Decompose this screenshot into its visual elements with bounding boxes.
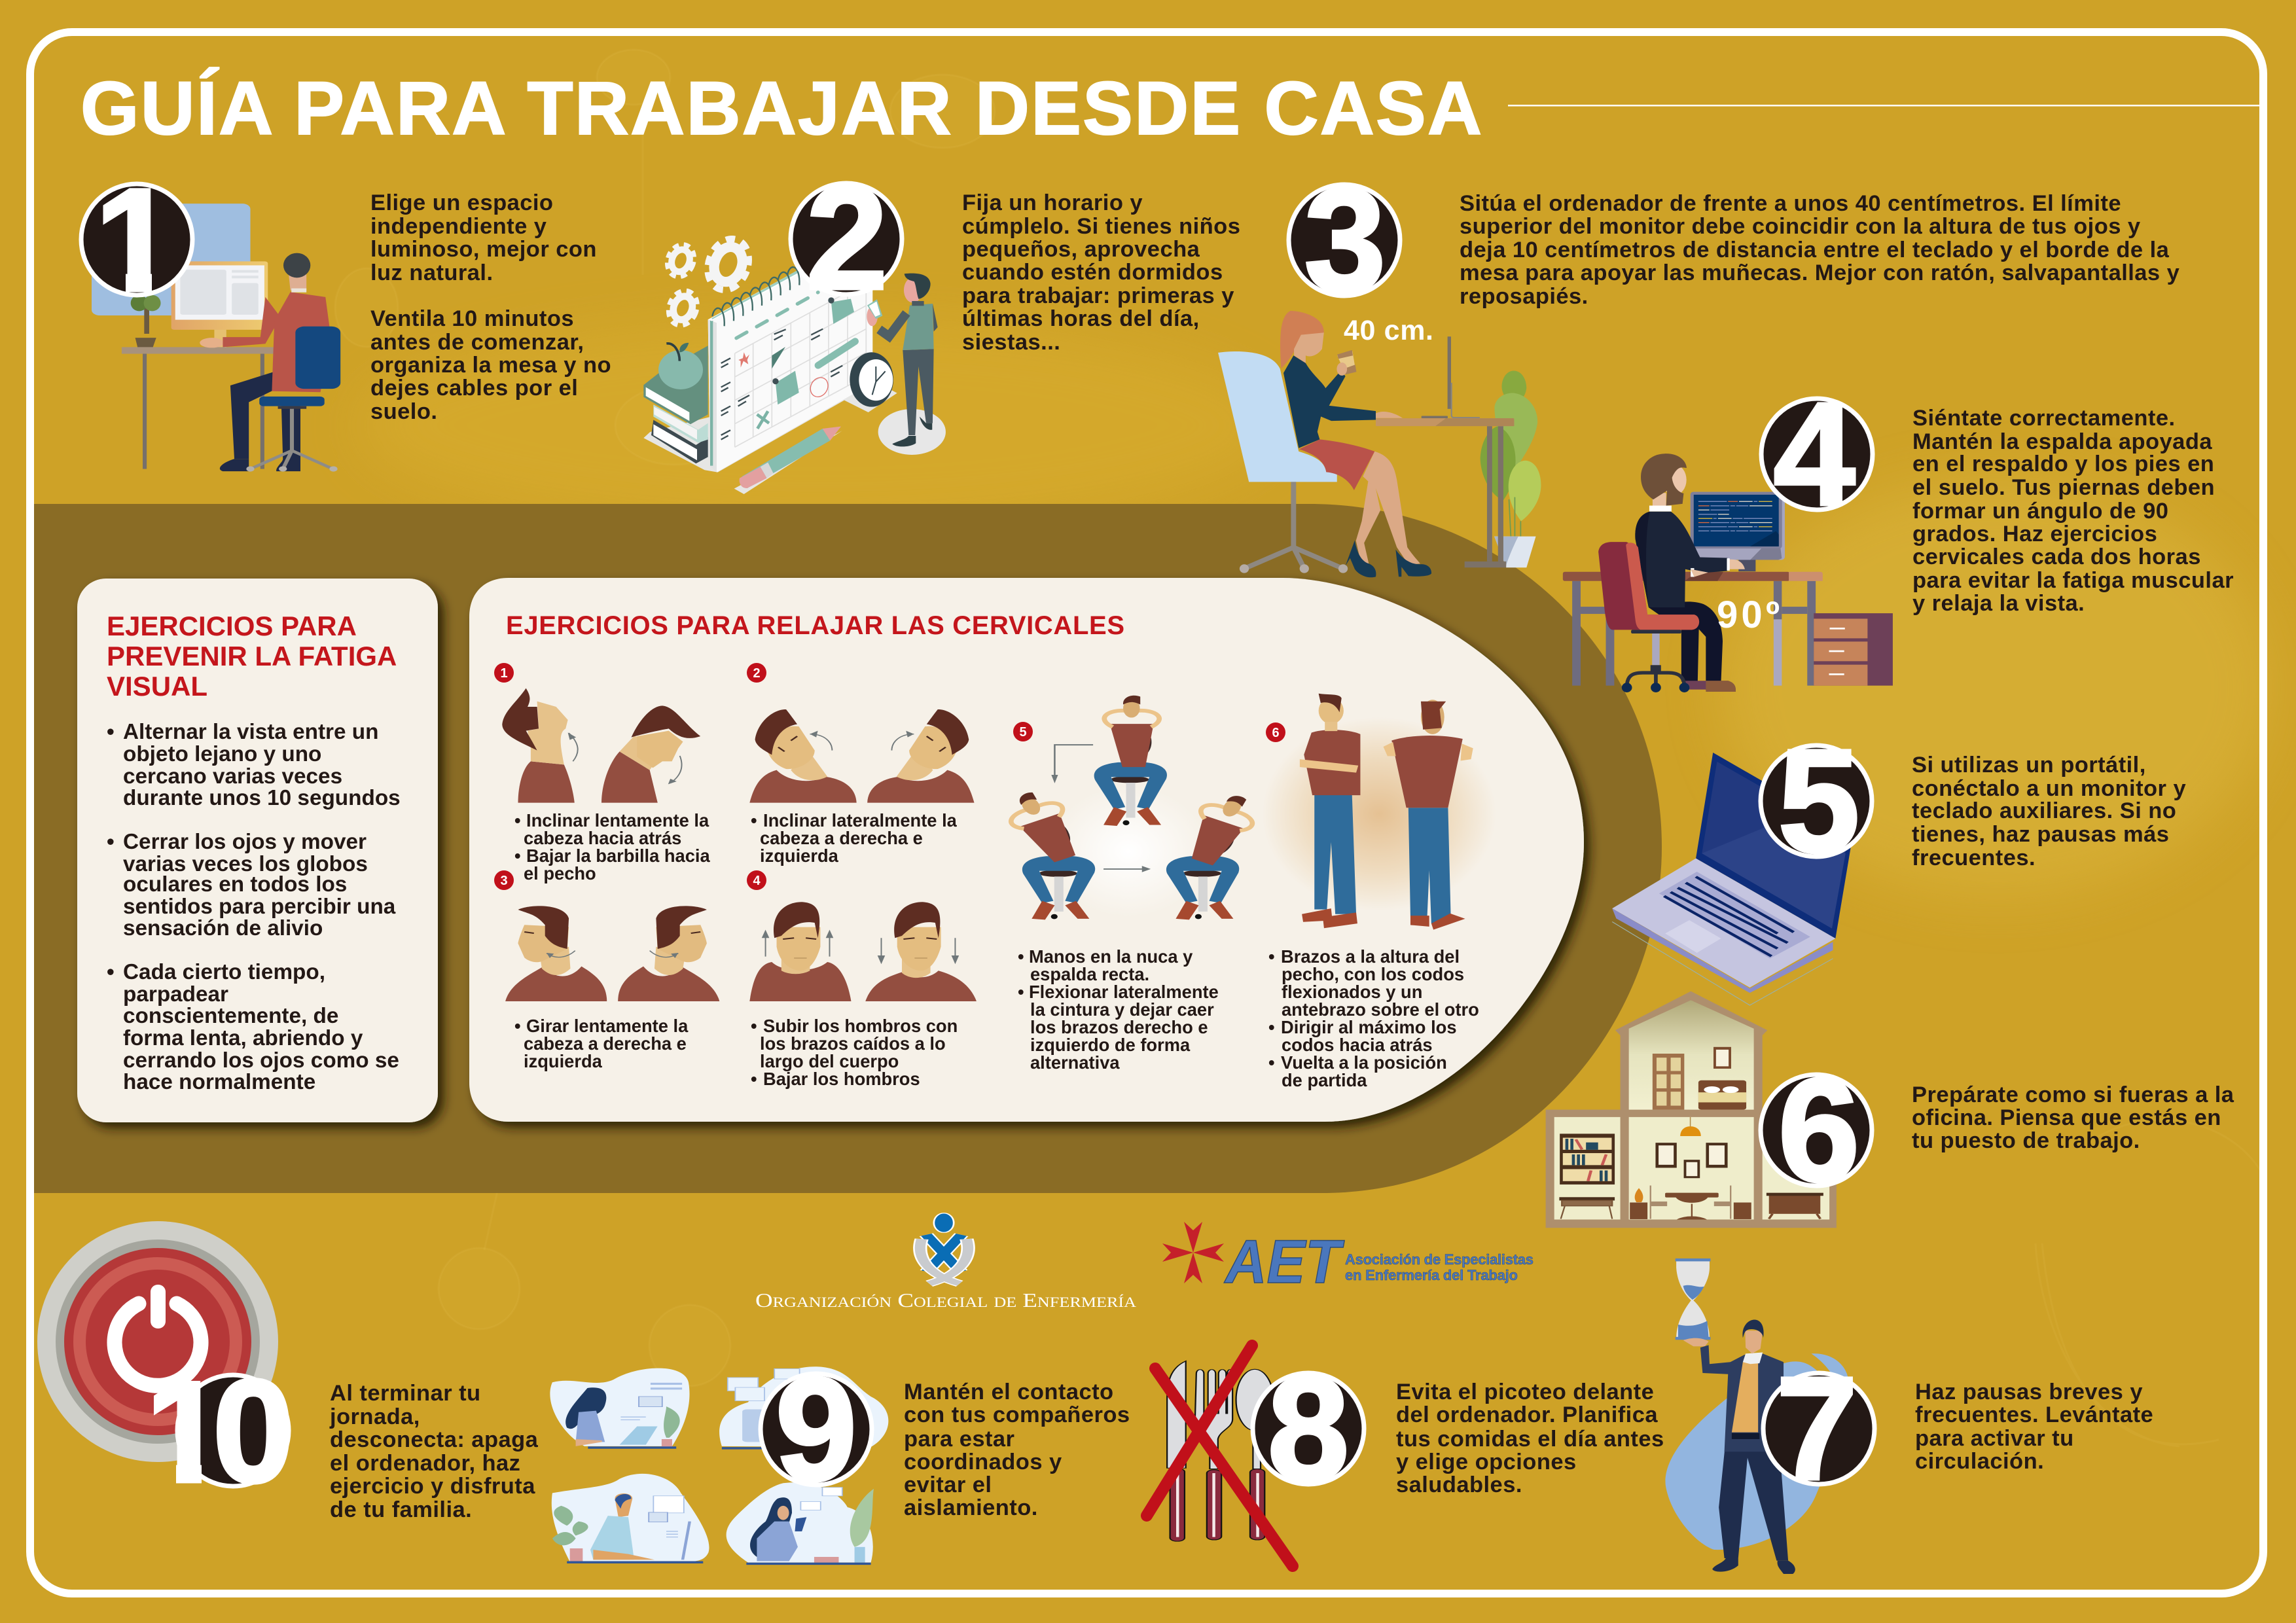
text: step 2: siestas... [962, 330, 1060, 355]
number 1: 1 [95, 158, 176, 322]
icon: power button [37, 1221, 278, 1462]
heading: cervical exercises: EJERCICIOS PARA RELAJAR LAS CERVICALES [506, 611, 1124, 640]
numbered red badges: 4 [753, 874, 761, 888]
step 1 [81, 158, 611, 472]
text: step 1: dejes cables por el [370, 376, 578, 401]
text: step 2: Fija un horario y [962, 190, 1143, 215]
text: step 6: oficina. Piensa que estás en [1912, 1105, 2221, 1130]
number 2: 2 [806, 156, 888, 320]
logo wordmark: AET [1224, 1227, 1345, 1296]
figure: neck tilt right [867, 709, 975, 803]
exercise text 6: Dirigir al máximo los [1281, 1017, 1457, 1037]
figure: standing elbows back [1262, 694, 1496, 930]
illustration: woman at desk with 40 cm screen distance [1218, 311, 1541, 577]
heading: visual fatigue: PREVENIR LA FATIGA [107, 641, 397, 671]
illustration: person at desk [92, 204, 340, 472]
exercise text 6: antebrazo sobre el otro [1282, 999, 1479, 1020]
list: visual fatigue tips: sensación de alivio [123, 916, 323, 940]
text: step 4: formar un ángulo de 90 [1912, 499, 2168, 524]
exercise text 3: Girar lentamente la [526, 1016, 689, 1036]
exercise text 5: los brazos derecho e [1030, 1017, 1208, 1037]
exercise text 1: • [514, 846, 521, 866]
text: step 5: teclado auxiliares. Si no [1912, 798, 2176, 823]
text: step 9: aislamiento. [904, 1495, 1038, 1520]
text: step 1: luz natural. [370, 260, 493, 285]
label: 90 degrees: 90º [1717, 594, 1780, 636]
exercise text 6: • [1268, 1052, 1275, 1073]
number 7: 7 [1776, 1347, 1857, 1510]
exercise text 1: • [514, 810, 521, 830]
text: step 10: jornada, [329, 1404, 420, 1429]
text: step 3: reposapiés. [1460, 284, 1588, 309]
illustration: four people communicating online [550, 1366, 888, 1565]
illustration: calendar, gears and person [643, 229, 946, 494]
figure: neck turn left [505, 906, 607, 1001]
number 3: 3 [1304, 158, 1386, 322]
text: step 10: ejercicio y disfruta [330, 1474, 535, 1499]
heading: visual fatigue: VISUAL [107, 671, 207, 702]
text: step 3: mesa para apoyar las muñecas. Mejor con ratón, salvapantallas y [1460, 260, 2179, 285]
exercise text 5: izquierdo de forma [1030, 1035, 1191, 1055]
list: visual fatigue tips: cercano varias veces [123, 764, 342, 789]
exercise text 6: • [1268, 946, 1275, 967]
exercise text 1: Inclinar lentamente la [526, 810, 709, 830]
exercise text 5: espalda recta. [1030, 964, 1149, 984]
label: 40 cm: 40 cm. [1344, 315, 1433, 346]
exercise text 1: el pecho [524, 863, 596, 883]
figure: seated waist bends [999, 696, 1265, 919]
text: step 8: saludables. [1396, 1472, 1522, 1497]
text: step 6: Prepárate como si fueras a la [1912, 1082, 2234, 1107]
step 3 [1218, 158, 2179, 577]
text: step 8: del ordenador. Planifica [1396, 1402, 1658, 1427]
text: step 4: Siéntate correctamente. [1912, 406, 2176, 431]
number 4: 4 [1774, 372, 1855, 536]
illustration: house cross-section [1546, 991, 1837, 1228]
text: step 7: frecuentes. Levántate [1915, 1402, 2153, 1427]
number 9: 9 [776, 1347, 857, 1511]
logo: AET [1162, 1222, 1534, 1296]
text: step 8: tus comidas el día antes [1396, 1427, 1664, 1452]
exercise text 6: flexionados y un [1282, 982, 1422, 1002]
illustration: crossed cutlery [1147, 1346, 1293, 1566]
text: step 7: para activar tu [1915, 1426, 2074, 1451]
text: step 1: Elige un espacio [370, 190, 553, 215]
list: visual fatigue tips: objeto lejano y uno [123, 742, 321, 766]
exercise text 6: • [1268, 1017, 1275, 1037]
list: visual fatigue tips: • [107, 960, 115, 984]
panel: visual fatigue exercises [77, 579, 438, 1122]
text: step 5: tienes, haz pausas más [1912, 822, 2169, 847]
text: step 1: luminoso, mejor con [370, 237, 597, 262]
exercise text 6: de partida [1282, 1070, 1367, 1090]
illustration: man at computer desk [1563, 454, 1893, 692]
exercise text 6: codos hacia atrás [1282, 1035, 1433, 1055]
list: visual fatigue tips: cerrando los ojos como se [123, 1048, 399, 1073]
list: visual fatigue tips: oculares en todos los [123, 872, 347, 897]
logo: Organización Colegial de Enfermería [755, 1213, 1136, 1311]
text: step 4: cervicales cada dos horas [1912, 544, 2201, 569]
figure: neck tilt left [749, 709, 857, 803]
logo subtitle: en Enfermería del Trabajo [1345, 1267, 1518, 1283]
numbered red badges: 6 [1272, 726, 1280, 740]
exercise text 6: Vuelta a la posición [1281, 1052, 1447, 1073]
figure: head back [502, 688, 578, 803]
exercise text 1: Bajar la barbilla hacia [526, 846, 711, 866]
number 10: 1 [145, 1349, 226, 1513]
text: step 1: suelo. [370, 399, 437, 424]
number 1 [79, 182, 195, 297]
exercise text 5: alternativa [1030, 1052, 1120, 1073]
text: step 5: Si utilizas un portátil, [1912, 753, 2146, 777]
list: visual fatigue tips: parpadear [123, 982, 228, 1007]
exercise text 4: • [751, 1069, 757, 1089]
list: visual fatigue tips: durante unos 10 segundos [123, 786, 401, 810]
text: step 9: coordinados y [904, 1450, 1062, 1474]
exercise figures 5 and 6 [999, 694, 1496, 930]
heading: visual fatigue: EJERCICIOS PARA [107, 611, 357, 641]
dark curved band [34, 504, 1662, 1193]
list: visual fatigue tips: hace normalmente [123, 1070, 315, 1094]
text: step 10: de tu familia. [330, 1497, 472, 1522]
exercise text 6: Brazos a la altura del [1281, 946, 1460, 967]
text: step 10: Al terminar tu [330, 1381, 481, 1406]
text: step 1: independiente y [370, 214, 547, 239]
exercise text 4: los brazos caídos a lo [760, 1033, 946, 1054]
exercise text 5: • [1018, 946, 1024, 967]
text: step 2: cuando estén dormidos [962, 260, 1223, 285]
text: step 6: tu puesto de trabajo. [1912, 1128, 2140, 1153]
text: step 4: Mantén la espalda apoyada [1912, 429, 2212, 454]
text: step 3: superior del monitor debe coincidir con la altura de tus ojos y [1460, 214, 2141, 239]
exercise text 5: • [1018, 982, 1024, 1002]
exercise text 4: Subir los hombros con [763, 1016, 958, 1036]
logo caption: Organización Colegial de Enfermería [755, 1289, 1136, 1311]
text: step 10: desconecta: apaga [330, 1427, 539, 1452]
text: step 9: Mantén el contacto [904, 1380, 1114, 1404]
step 4 [1563, 372, 2234, 692]
exercise text 2: • [751, 810, 757, 830]
step 8 [1147, 1346, 1664, 1566]
exercise text 3: • [514, 1016, 521, 1036]
logo subtitle: Asociación de Especialistas [1345, 1251, 1534, 1268]
text: step 4: grados. Haz ejercicios [1912, 522, 2157, 546]
text: step 1: Ventila 10 minutos [370, 306, 574, 331]
numbered red badges: 2 [753, 666, 761, 681]
text: step 1: organiza la mesa y no [370, 353, 611, 378]
list: visual fatigue tips: Cada cierto tiempo, [123, 960, 325, 984]
number 10: 0 [213, 1349, 294, 1513]
text: step 2: pequeños, aprovecha [962, 237, 1200, 262]
figure: neck turn right [618, 906, 719, 1001]
exercise text 6: pecho, con los codos [1282, 964, 1464, 984]
list: visual fatigue tips: forma lenta, abriendo y [123, 1026, 363, 1050]
numbered red badges: 3 [500, 874, 508, 888]
step 2 [643, 156, 1240, 494]
exercise text 5: Manos en la nuca y [1029, 946, 1193, 967]
text: step 5: frecuentes. [1912, 846, 2036, 870]
text: step 2: cúmplelo. Si tienes niños [962, 214, 1240, 239]
text: step 3: Sitúa el ordenador de frente a unos 40 centímetros. El límite [1460, 191, 2121, 216]
list: visual fatigue tips: sentidos para percibir una [123, 895, 396, 919]
text: step 2: últimas horas del día, [962, 306, 1200, 331]
exercise figures 1 to 4 [502, 688, 977, 1001]
text: step 4: y relaja la vista. [1912, 591, 2085, 616]
exercise text 4: Bajar los hombros [763, 1069, 920, 1089]
step 6 [1546, 991, 2234, 1228]
exercise text 2: cabeza a derecha e [760, 828, 923, 848]
exercise text 4: • [751, 1016, 757, 1036]
text: step 3: deja 10 centímetros de distancia entre el teclado y el borde de la [1460, 238, 2170, 262]
list: visual fatigue tips: varias veces los globos [123, 852, 368, 876]
numbered red badges: 1 [500, 666, 508, 681]
step 9 [550, 1347, 1130, 1565]
number 8: 8 [1268, 1347, 1349, 1510]
illustration: man with hourglass [1665, 1258, 1848, 1574]
text: step 9: para estar [904, 1427, 1014, 1452]
illustration: laptop [1612, 753, 1853, 1005]
numbered red badges [494, 663, 1285, 890]
text: step 9: evitar el [904, 1472, 992, 1497]
exercise text 4: largo del cuerpo [760, 1051, 899, 1071]
list: visual fatigue tips: conscientemente, de [123, 1004, 338, 1028]
text: step 4: en el respaldo y los pies en [1912, 452, 2214, 476]
figure: shoulders up [749, 902, 851, 1001]
list: visual fatigue tips: • [107, 720, 115, 744]
number 10 [154, 1373, 291, 1488]
text: step 4: el suelo. Tus piernas deben [1912, 475, 2215, 500]
number 6: 6 [1778, 1048, 1859, 1212]
text: step 9: con tus compañeros [904, 1402, 1130, 1427]
text: step 5: conéctalo a un monitor y [1912, 776, 2186, 801]
figure: shoulders down [865, 902, 977, 1001]
step 10 [37, 1221, 539, 1522]
exercise text 1: cabeza hacia atrás [524, 828, 681, 848]
number 5: 5 [1778, 719, 1859, 883]
text: step 7: circulación. [1915, 1449, 2044, 1474]
numbered red badges: 5 [1019, 725, 1027, 740]
exercise text 3: cabeza a derecha e [524, 1033, 687, 1054]
text: step 2: para trabajar: primeras y [962, 283, 1234, 308]
text: step 7: Haz pausas breves y [1915, 1380, 2143, 1404]
panel: cervical exercises [469, 578, 1584, 1122]
step 5 [1612, 719, 2186, 1005]
step 7 [1665, 1258, 2153, 1574]
exercise text 3: izquierda [524, 1051, 603, 1071]
list: visual fatigue tips: • [107, 830, 115, 854]
exercise text 5: Flexionar lateralmente [1029, 982, 1219, 1002]
exercise text 2: izquierda [760, 846, 839, 866]
text: step 8: y elige opciones [1396, 1450, 1577, 1474]
text: step 4: para evitar la fatiga muscular [1912, 568, 2234, 593]
figure: head forward [601, 705, 700, 803]
text: step 8: Evita el picoteo delante [1396, 1380, 1654, 1404]
text: step 1: antes de comenzar, [370, 330, 584, 355]
title: GUÍA PARA TRABAJAR DESDE CASA [81, 67, 1482, 151]
text: step 10: el ordenador, haz [330, 1451, 520, 1476]
list: visual fatigue tips: Cerrar los ojos y mover [123, 830, 367, 854]
exercise text 5: la cintura y dejar caer [1030, 999, 1214, 1020]
list: visual fatigue tips: Alternar la vista entre un [123, 720, 378, 744]
title rule [1508, 105, 2262, 106]
exercise text 2: Inclinar lateralmente la [763, 810, 958, 830]
